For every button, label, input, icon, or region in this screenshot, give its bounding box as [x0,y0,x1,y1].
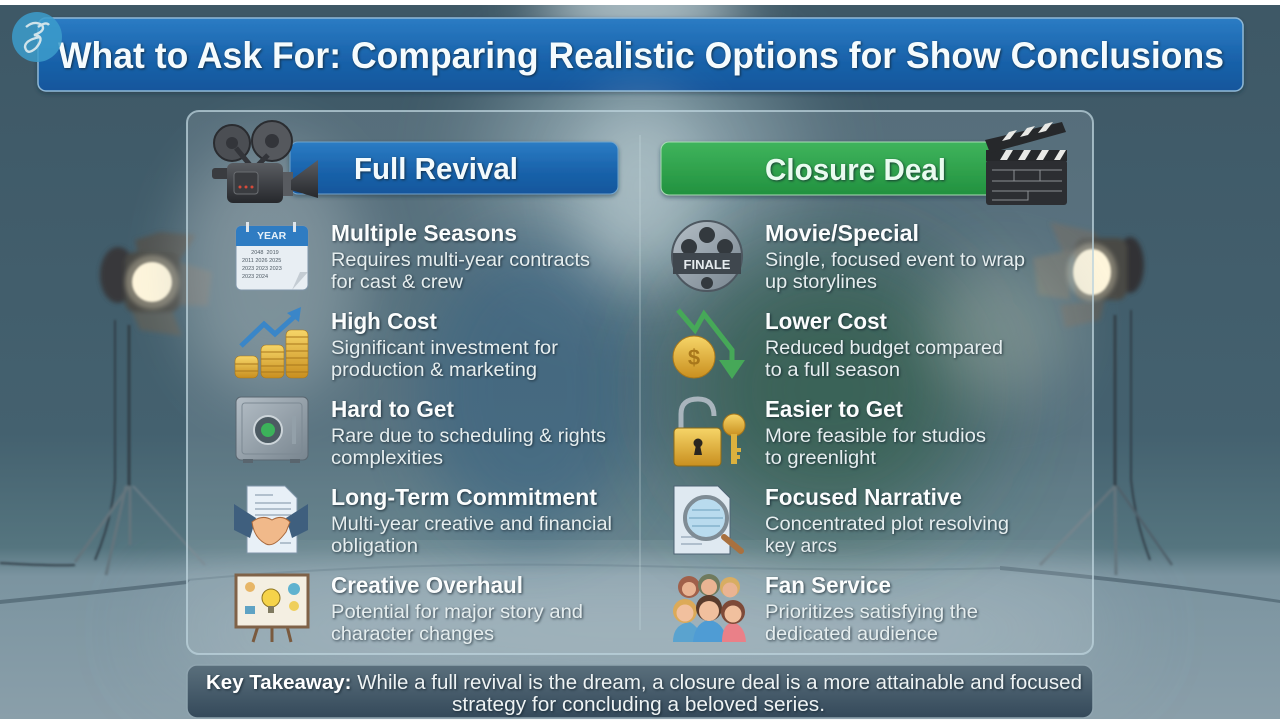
row: Creative Overhaul: character changes [331,623,494,645]
row: Fan Service [673,572,978,645]
row: Long-Term Commitment [234,484,612,557]
row: Fan Service: Fan Service [765,572,891,598]
icon: film camera [212,121,318,203]
icon: contract handshake [234,486,308,553]
header: Closure Deal [661,142,996,195]
row: Hard to Get: Hard to Get [331,396,454,422]
row: Easier to Get: More feasible for studios [765,425,986,447]
icon: idea easel [236,575,308,642]
icon: calendar: 2011 2026 2025 [242,258,281,264]
row: Movie/Special: Single, focused event to wrap [765,249,1025,271]
icon: coin and falling arrow: $ [688,345,700,370]
key takeaway box [187,665,1093,718]
row: Movie/Special: up storylines [765,271,877,293]
row: Focused Narrative: key arcs [765,535,837,557]
row: Easier to Get: to greenlight [765,447,877,469]
icon: finale film reel [672,221,742,291]
row: Lower Cost [673,308,1003,381]
icon: coins and rising arrow [235,307,308,378]
row: Long-Term Commitment: obligation [331,535,418,557]
icon: finale film reel: FINALE [684,257,731,272]
row: Multiple Seasons: for cast & crew [331,271,464,293]
key takeaway box: Key Takeaway: While a full revival is the dream, a closure deal is a more attainable and focused [206,672,1082,694]
row: Multiple Seasons: Requires multi-year contracts [331,249,590,271]
icon: safe [236,397,308,463]
row: Focused Narrative: Focused Narrative [765,484,962,510]
icon: calendar: 2023 2023 2023 [242,266,282,272]
row: Easier to Get [674,396,986,469]
row: Movie/Special [672,220,1025,293]
row: High Cost: production & marketing [331,359,537,381]
title banner [38,18,1243,91]
icon: group of fans [673,574,746,642]
row: Hard to Get: Rare due to scheduling & rights [331,425,606,447]
icon: calendar [236,222,308,290]
row: Creative Overhaul: Potential for major story and [331,601,583,623]
row: Multiple Seasons [236,220,590,293]
row: Multiple Seasons: Multiple Seasons [331,220,517,246]
row: Long-Term Commitment: Multi-year creative and financial [331,513,612,535]
header: Closure Deal: Closure Deal [765,152,946,187]
row: Focused Narrative [674,484,1009,557]
icon: document and magnifier [674,486,741,554]
logo badge [12,12,62,62]
comparison panel [180,100,1093,654]
right studio light [1033,222,1172,575]
row: Focused Narrative: Concentrated plot resolving [765,513,1009,535]
row: Hard to Get [236,396,606,469]
row: Creative Overhaul [236,572,583,645]
row: Creative Overhaul: Creative Overhaul [331,572,523,598]
row: Fan Service: dedicated audience [765,623,938,645]
row: Hard to Get: complexities [331,447,443,469]
key takeaway box: strategy for concluding a beloved series. [452,694,825,716]
row: High Cost [235,307,559,381]
top white strip [0,0,1280,5]
row: Movie/Special: Movie/Special [765,220,919,246]
icon: calendar: 2048 2019 [242,250,279,256]
icon: calendar: YEAR [257,230,287,242]
left studio light [0,232,212,575]
header: Full Revival [290,142,618,194]
icon: coin and falling arrow [673,310,745,379]
title text: What to Ask For: Comparing Realistic Options for Show Conclusions [58,35,1224,76]
icon: calendar: 2023 2024 [242,274,268,280]
icon: clapperboard [985,122,1067,205]
row: Lower Cost: Lower Cost [765,308,887,334]
row: Lower Cost: to a full season [765,359,900,381]
row: Easier to Get: Easier to Get [765,396,903,422]
row: Lower Cost: Reduced budget compared [765,337,1003,359]
row: High Cost: Significant investment for [331,337,559,359]
row: High Cost: High Cost [331,308,437,334]
header: Full Revival: Full Revival [354,151,518,186]
icon: open padlock and key [674,399,745,466]
row: Fan Service: Prioritizes satisfying the [765,601,978,623]
row: Long-Term Commitment: Long-Term Commitment [331,484,597,510]
